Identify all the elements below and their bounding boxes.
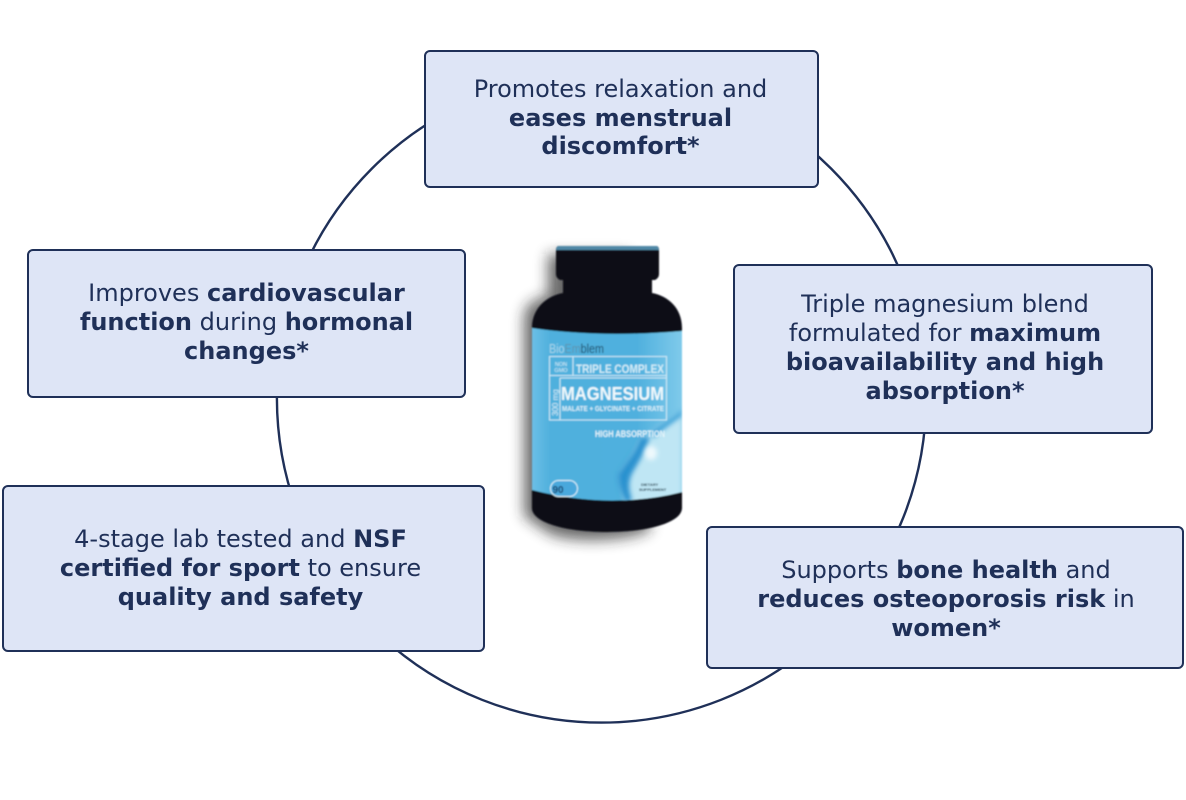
panel: cardiovascular function: Improves cardiovascular xyxy=(88,279,405,307)
panel: bone health xyxy=(706,526,1184,669)
product bottle image: GMO xyxy=(554,368,568,374)
bottle body xyxy=(532,276,682,532)
panel: magnesium blend: formulated for maximum xyxy=(789,319,1101,347)
product bottle image: 300 mg xyxy=(551,389,560,416)
panel: bone health: Supports bone health and xyxy=(781,556,1111,584)
label text: BioEmblem xyxy=(549,341,604,356)
panel: magnesium blend: Triple magnesium blend xyxy=(801,290,1089,318)
label frame xyxy=(550,356,666,420)
product bottle image: MALATE + GLYCINATE + CITRATE xyxy=(562,406,664,413)
panel: magnesium blend: bioavailability and high xyxy=(786,348,1104,376)
panel: lab tested xyxy=(2,485,485,652)
panel: menstrual discomfort xyxy=(424,50,819,188)
bottle label xyxy=(532,328,682,501)
product bottle image xyxy=(513,243,684,550)
panel: magnesium blend xyxy=(733,264,1153,434)
product bottle image: DIETARY xyxy=(641,482,658,487)
panel: cardiovascular function: changes* xyxy=(184,337,309,365)
bottle shadow xyxy=(524,254,650,540)
panel: lab tested: certified for sport to ensure xyxy=(60,554,421,582)
product bottle image: MAGNESIUM xyxy=(561,383,664,404)
panel: bone health: women* xyxy=(891,614,1001,642)
panel: menstrual discomfort: discomfort* xyxy=(541,132,700,160)
capsule count badge xyxy=(550,480,578,496)
panel: lab tested: quality and safety xyxy=(118,583,363,611)
panel: menstrual discomfort: Promotes relaxation and xyxy=(474,75,767,103)
panel: lab tested: 4-stage lab tested and NSF xyxy=(74,525,407,553)
cap highlight xyxy=(556,246,659,250)
panel: cardiovascular function: function during hormonal xyxy=(80,308,413,336)
product bottle image: SUPPLEMENT xyxy=(639,487,667,492)
product bottle image: NON xyxy=(555,362,567,368)
product bottle image: HIGH ABSORPTION xyxy=(595,429,665,439)
panel: menstrual discomfort: eases menstrual xyxy=(509,104,732,132)
panel: cardiovascular function xyxy=(27,249,466,398)
panel: bone health: reduces osteoporosis risk in xyxy=(757,585,1135,613)
bottle cap xyxy=(556,246,659,280)
panel: magnesium blend: absorption* xyxy=(866,377,1024,405)
product bottle image: TRIPLE COMPLEX xyxy=(576,362,664,376)
marble pattern xyxy=(618,410,682,505)
product bottle image: 90 xyxy=(552,485,564,496)
